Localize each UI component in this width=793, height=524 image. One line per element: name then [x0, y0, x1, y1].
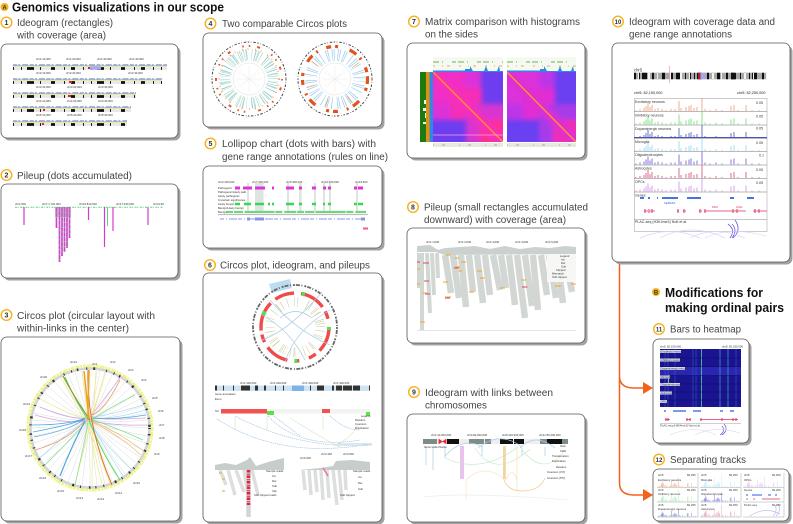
- panel 1: ideogram with coverage: chr1:20,000: [66, 57, 81, 61]
- panel 12: separating tracks: Microglia: [701, 478, 713, 482]
- ideogram and arcs: Duplication: [355, 426, 369, 430]
- heading 3: [1, 310, 155, 334]
- connector arrows from panel 10 to panels 11 and 12: [620, 262, 653, 501]
- section heading B: B: [654, 290, 659, 296]
- panel 1: ideogram with coverage: chr2:20,000: [66, 71, 81, 75]
- gene annotations: GIN1: [736, 205, 743, 209]
- pileup left: Del: [272, 479, 277, 483]
- heading 11: Bars to heatmap: [670, 324, 741, 336]
- panel 1: ideogram with coverage: chr4:10,000: [36, 99, 51, 103]
- panel 9: ideogram with links: Gene Label Name: [424, 445, 447, 449]
- heading 10: 10: [615, 20, 622, 26]
- panel 3: circos plot: chr12: [115, 491, 122, 495]
- heading 6: 6: [208, 262, 212, 270]
- ideogram and arcs: chr1:400,000: [333, 381, 350, 385]
- panel 5: lollipop chart: chr2:100,000: [218, 180, 235, 184]
- ideogram and arcs: Legend: [361, 414, 371, 418]
- panel 8: pileup reads: chr1:3,000: [486, 240, 500, 244]
- coverage tracks: 0.05: [756, 141, 763, 145]
- panel 11: bars to heatmap: [653, 339, 752, 446]
- heading 9: [409, 387, 553, 412]
- pileup left: Ins: [272, 474, 276, 478]
- pileup right: chr3:600: [343, 452, 354, 456]
- PLAC-seq track: PLAC-seq (H3K4me3) Nott et al.: [635, 220, 687, 224]
- panel 5: lollipop chart: Benign: [218, 210, 227, 214]
- ideogram and arcs: Exon: [215, 397, 222, 401]
- panel 3: circos plot: chr19: [23, 402, 30, 406]
- panel 12: separating tracks: 82,250: [729, 488, 738, 492]
- panel 5: lollipop chart: chr19:500: [355, 180, 368, 184]
- coverage tracks: Inhibitory neurons: [635, 114, 664, 118]
- heading 7: Matrix comparison with histograms: [425, 17, 580, 28]
- panel 5: lollipop chart: Benign/Likely benign: [218, 206, 244, 210]
- section heading B: making ordinal pairs: [665, 301, 784, 315]
- pileup right: Ins: [358, 475, 362, 479]
- heading 9: Ideogram with links between: [425, 388, 553, 399]
- heatmap: Dopaminergic neurons: [660, 366, 689, 370]
- panel 8: pileup reads: Legend: [560, 254, 570, 258]
- heading 10: Ideogram with coverage data and: [629, 17, 775, 28]
- heading 7: [409, 16, 580, 40]
- heading 1: [1, 17, 113, 42]
- ideogram and arcs: SV: [215, 409, 219, 413]
- heatmap: chr5: 82,250,000: [722, 344, 743, 348]
- panel 9: ideogram with links: Duplication: [552, 459, 566, 463]
- panel 3: circos plot: [1, 337, 182, 524]
- heatmap: OPCs: [660, 400, 669, 404]
- heading 5: 5: [209, 141, 213, 148]
- coverage tracks: 0.05: [756, 126, 763, 130]
- coverage tracks: [634, 98, 767, 232]
- panel 12: separating tracks: PLAC-seq: [744, 503, 757, 507]
- panel 12: separating tracks: 82,250: [687, 488, 696, 492]
- pileup right: Soft clipped: [340, 493, 355, 497]
- panel 1: ideogram with coverage: [1, 44, 180, 140]
- circos plot: [253, 279, 337, 369]
- pileup left: Sub: [272, 484, 277, 488]
- coverage tracks: Oligodendrocytes: [635, 153, 663, 157]
- panel 2: pileup dots: chr7:1,720,000: [42, 202, 61, 206]
- ideogram: chr5: 82,250,000: [737, 91, 766, 95]
- panel 12: separating tracks: 82,250: [772, 473, 781, 477]
- heading 2: 2: [5, 172, 9, 180]
- panel 3: circos plot: chr13: [97, 497, 104, 501]
- panel 9: ideogram with links: Inversion (5'5'): [547, 476, 565, 480]
- heading 9: chromosomes: [425, 400, 487, 412]
- ideogram: [634, 66, 767, 95]
- panel 3: circos plot: chr17: [25, 454, 32, 458]
- panel 1: ideogram with coverage: chr3:20,000: [67, 85, 82, 89]
- coverage tracks: Microglia: [635, 140, 649, 144]
- panel 12: separating tracks: OPCs: [744, 478, 752, 482]
- gene annotations: Genes: [635, 194, 646, 198]
- heading 2: Pileup (dots accumulated): [17, 171, 132, 182]
- panel 3: circos plot: chr7: [159, 423, 165, 427]
- heatmap: Inhibitory neurons: [660, 358, 683, 362]
- pileup left: Clip: [272, 489, 277, 493]
- heatmap: Excitatory neurons: [660, 350, 684, 354]
- panel 10: ideogram with coverage and gene annotations: [612, 43, 792, 264]
- panel 12: separating tracks: chr5: [658, 488, 664, 492]
- panel 12: separating tracks: Oligodendrocytes: [701, 492, 723, 496]
- panel 3: circos plot: chr8: [159, 436, 165, 440]
- panel 12: separating tracks: Inhibitory neurons: [658, 492, 681, 496]
- panel 8: pileup reads: Sub: [561, 264, 566, 268]
- pileup left: Soft clipped reads: [254, 493, 277, 497]
- panel 3: circos plot: chr15: [57, 489, 64, 493]
- panel 12: separating tracks: 82,250: [729, 473, 738, 477]
- pileup right: Sub: [358, 487, 363, 491]
- panel 5: lollipop chart: chr12:400,000: [321, 180, 339, 184]
- panel 3: circos plot: chr18: [19, 428, 26, 432]
- panel 3: circos plot: chr10: [133, 481, 140, 485]
- heading 8: Pileup (small rectangles accumulated: [424, 202, 588, 214]
- panel 3: circos plot: chr21: [70, 360, 77, 364]
- panel 8: pileup reads: Ins: [561, 258, 565, 262]
- panel 1: ideogram with coverage: chr5:10,000: [36, 113, 51, 117]
- panel 12: separating tracks: chr5: [658, 503, 664, 507]
- panel 3: circos plot: chr2: [110, 360, 116, 364]
- heading 1: with coverage (area): [16, 30, 106, 42]
- pileup right: chr3:200: [300, 456, 311, 460]
- panel 3: circos plot: chr3: [128, 368, 134, 372]
- panel 9: ideogram with links: CDH: [560, 449, 566, 453]
- panel 1: ideogram with coverage: chr1:10,000: [36, 57, 51, 61]
- panel 5: lollipop chart: Pathogenic/Likely path.: [218, 190, 247, 194]
- coverage tracks: Excitatory neurons: [635, 100, 665, 104]
- panel 3: circos plot: chr5: [152, 396, 158, 400]
- ideogram: chr5: [634, 68, 643, 72]
- panel 5: lollipop chart: Uncertain significance: [218, 198, 246, 202]
- panel 9: ideogram with links: chr9:120,900,000: [502, 433, 524, 437]
- gene annotations: PAM: [712, 205, 719, 209]
- panel 5: lollipop chart: Likely benign: [218, 202, 235, 206]
- panel 9: ideogram with links: [407, 414, 588, 524]
- panel 8: pileup reads: [407, 228, 588, 346]
- heatmap: chr5: 82,150,000: [660, 344, 681, 348]
- heading 8: downward) with coverage (area): [424, 215, 566, 226]
- ideogram and arcs: chr1:100,000: [240, 381, 257, 385]
- side histograms: [420, 57, 576, 147]
- panel 12: separating tracks: 82,250: [772, 503, 781, 507]
- ideogram and arcs: chr1:200,000: [270, 381, 287, 385]
- panel 4: two circos plots: [203, 33, 384, 130]
- panel 9: ideogram with links: Inversion (3'3'): [547, 470, 565, 474]
- panel 12: separating tracks: Dopaminergic neurons: [658, 507, 687, 511]
- panel 8: pileup reads: chr1:5,000: [545, 240, 559, 244]
- panel 12: separating tracks: chr5: [744, 473, 750, 477]
- panel 9: ideogram with links: chr1:10,000,000: [431, 433, 452, 437]
- heading 5: gene range annotations (rules on line): [222, 152, 388, 163]
- heading 3: within-links in the center): [16, 324, 129, 334]
- heading 4: Two comparable Circos plots: [222, 19, 347, 30]
- gene annotations: [635, 194, 767, 213]
- panel 12: separating tracks: chr5: [701, 473, 707, 477]
- PLAC-seq track: [634, 220, 767, 238]
- ideogram: chr5: 82,150,000: [634, 91, 662, 95]
- panel 12: separating tracks: 82,250: [687, 473, 696, 477]
- heading 7: on the sides: [425, 30, 478, 40]
- heatmap: [660, 344, 743, 407]
- coverage tracks: Astrocytes: [635, 166, 652, 170]
- ideogram and arcs: [215, 381, 372, 448]
- pileup right: chr3:400: [321, 452, 332, 456]
- coverage tracks: 0.05: [756, 181, 763, 185]
- heading 3: 3: [5, 312, 9, 320]
- heatmap: Microglia: [660, 375, 672, 379]
- matrix right: [507, 72, 576, 142]
- panel 1: ideogram with coverage: chr5:30,000: [98, 113, 113, 117]
- heading 9: 9: [412, 390, 416, 396]
- heading 1: 1: [5, 20, 9, 27]
- panel 8: pileup reads: Soft clipped: [552, 275, 567, 279]
- panel 3: circos plot: chr9: [154, 452, 160, 456]
- panel 3: circos plot: chr14: [76, 496, 83, 500]
- panel 7: matrix comparison: [407, 43, 588, 160]
- panel 8: pileup reads: Mismatch: [552, 272, 564, 276]
- ideogram and arcs: Deletion: [355, 418, 366, 422]
- panel 5: lollipop chart: [203, 166, 384, 250]
- panel 1: ideogram with coverage: chr2:40,000: [128, 71, 143, 75]
- panel 1: ideogram with coverage: chr4:20,000: [67, 99, 82, 103]
- panel 8: pileup reads: chr1:4,000: [515, 240, 529, 244]
- heading 1: Ideogram (rectangles): [17, 18, 113, 29]
- panel 8: pileup reads: chr1:2,000: [458, 240, 472, 244]
- pileup right: [300, 452, 371, 505]
- coverage tracks: 0.1: [759, 154, 764, 158]
- panel 12: separating tracks: Excitatory neurons: [658, 478, 682, 482]
- heading 5: [205, 138, 388, 163]
- heading 7: 7: [412, 19, 416, 26]
- panel 1: ideogram with coverage: chr1:40,000: [129, 57, 144, 61]
- circos plot left: [212, 42, 286, 116]
- coverage tracks: 0.05: [756, 114, 763, 118]
- panel 1: ideogram with coverage: chr3:10,000: [36, 85, 51, 89]
- panel 1: ideogram with coverage: chr2:10,000: [36, 71, 51, 75]
- section heading B: [652, 286, 784, 315]
- heading 8: 8: [411, 204, 415, 212]
- panel 3: circos plot: chr16: [39, 476, 46, 480]
- panel 9: ideogram with links: Translocation: [552, 454, 569, 458]
- heading 10: [613, 16, 775, 40]
- panel 12: separating tracks: chr5: [658, 473, 664, 477]
- pileup left: [215, 457, 284, 517]
- panel 2: pileup dots: chr10:810,000: [79, 202, 97, 206]
- heading 12: 12: [656, 458, 663, 464]
- coverage tracks: Dopaminergic neurons: [635, 127, 671, 131]
- pileup right: Sample reads: [353, 469, 371, 473]
- panel 1: ideogram with coverage: chr1:30,000: [97, 57, 112, 61]
- panel 1: ideogram with coverage: chr3:30,000: [98, 85, 113, 89]
- panel 2: pileup dots: chr1:500: [15, 202, 26, 206]
- coverage tracks: OPCs: [635, 180, 645, 184]
- panel 5: lollipop chart: chr7:200,000: [252, 180, 269, 184]
- panel 2: pileup dots: chr21:90: [153, 202, 164, 206]
- genes and PLAC-seq: PLAC-seq (H3K4me3) Nott et al.: [660, 424, 701, 428]
- heading 10: gene range annotations: [629, 30, 732, 40]
- section heading A: A: [2, 5, 7, 11]
- panel 2: pileup dots: [1, 184, 180, 280]
- panel 8: pileup reads: chr1:1,000: [426, 240, 440, 244]
- panel 9: ideogram with links: Deletion: [556, 465, 567, 469]
- ideogram and arcs: chr1:300,000: [302, 381, 319, 385]
- matrix left: [433, 72, 503, 142]
- panel 9: ideogram with links: chr11:50,200,000: [539, 433, 561, 437]
- heading 11: 11: [656, 328, 663, 334]
- heatmap: Astrocytes: [660, 391, 674, 395]
- heading 8: [408, 202, 588, 226]
- panel 5: lollipop chart: Pathogenic: [218, 186, 233, 190]
- section heading A: Genomics visualizations in our scope: [12, 0, 224, 14]
- coverage tracks: 0.05: [756, 168, 763, 172]
- panel 9: ideogram with links: chr4:82,200,000: [467, 433, 488, 437]
- heading 4: 4: [209, 21, 213, 28]
- panel 1: ideogram with coverage: chr5:20,000: [67, 113, 82, 117]
- panel 8: pileup reads: Clipped: [556, 268, 566, 272]
- panel 8: pileup reads: Del: [561, 261, 566, 265]
- panel 3: circos plot: chr20: [40, 375, 47, 379]
- panel 5: lollipop chart: Likely pathogenic: [218, 194, 240, 198]
- panel 3: circos plot: chr6: [158, 409, 164, 413]
- heading 12: Separating tracks: [670, 455, 746, 466]
- panel 12: separating tracks: Genes: [744, 488, 753, 492]
- ideogram and arcs: Inversion: [355, 422, 367, 426]
- heatmap: Oligodendrocytes: [660, 382, 683, 386]
- circos plot right: [298, 42, 372, 116]
- heading 3: Circos plot (circular layout with: [17, 311, 155, 322]
- panel 2: pileup dots: chr17:330,000: [116, 202, 134, 206]
- panel 12: separating tracks: 82,250: [772, 488, 781, 492]
- panel 3: circos plot: chr1: [92, 362, 98, 366]
- heading 5: Lollipop chart (dots with bars) with: [222, 139, 376, 150]
- panel 12: separating tracks: [653, 469, 792, 524]
- heading 6: Circos plot, ideogram, and pileups: [220, 260, 370, 272]
- panel 12: separating tracks: 82,250: [729, 503, 738, 507]
- panel 3: circos plot: chr4: [141, 378, 147, 382]
- panel 12: separating tracks: Astrocytes: [701, 507, 715, 511]
- panel 5: lollipop chart: chr9:300,000: [286, 180, 303, 184]
- ideogram and arcs: Gene annotation: [215, 392, 236, 396]
- panel 12: separating tracks: chr5: [701, 503, 707, 507]
- panel 9: ideogram with links: Gain: [560, 444, 566, 448]
- panel 1: ideogram with coverage: chr4:30,000: [98, 99, 113, 103]
- coverage tracks: 0.05: [756, 101, 763, 105]
- panel 12: separating tracks: 82,250: [687, 503, 696, 507]
- gene annotations: SEMA6A: [664, 201, 675, 205]
- panel 6: circos, ideogram and pileups: [203, 273, 384, 524]
- section heading B: Modifications for: [665, 286, 763, 300]
- pileup right: Del: [358, 481, 363, 485]
- panel 12: separating tracks: chr5: [701, 488, 707, 492]
- pileup left: Sample reads: [266, 469, 284, 473]
